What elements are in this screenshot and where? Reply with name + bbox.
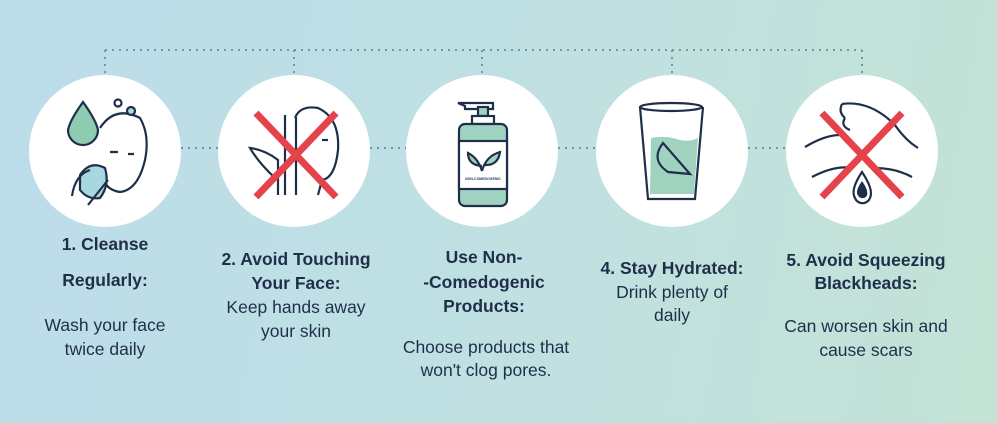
text: step 2: 2. Avoid Touching [221, 249, 371, 269]
text: step 2: Keep hands away [226, 297, 366, 317]
text: step 2: your skin [261, 321, 331, 341]
text: step 4: Drink plenty of [616, 282, 728, 302]
text: step 3: -Comedogenic [423, 272, 545, 292]
text: step 1: Wash your face [45, 315, 165, 335]
text: step 3: Choose products that [403, 337, 569, 357]
text: step 2 [221, 249, 371, 341]
text: step 1: 1. Cleanse [62, 234, 149, 254]
panel: products circle: NON-COMEDOGENIC [465, 177, 501, 181]
icon: hand and face [250, 107, 338, 195]
text: step 4: 4. Stay Hydrated: [601, 258, 743, 278]
panel: avoid touching circle [218, 75, 370, 227]
icon: water drop and face [68, 100, 147, 205]
panel: squeezing circle [786, 75, 938, 227]
text: step 2: Your Face: [251, 273, 341, 293]
panel: cleanse circle [29, 75, 181, 227]
icon: pump bottle [458, 103, 507, 206]
icon: red cross [256, 113, 336, 197]
text: step 1: twice daily [65, 339, 146, 359]
icon: glass of water with lime [640, 103, 703, 199]
text: step 3: Products: [443, 296, 525, 316]
icon: red cross [822, 113, 902, 197]
text: step 4: daily [654, 305, 690, 325]
text: step 1: Regularly: [62, 270, 148, 290]
text: step 3 [403, 247, 569, 380]
text: step 4 [601, 258, 743, 325]
icon: fingers squeezing [805, 103, 918, 203]
panel: hydrated circle [596, 75, 748, 227]
text: step 5: Can worsen skin and [784, 316, 948, 336]
text: step 5 [784, 250, 948, 360]
text: step 5: Blackheads: [814, 273, 918, 293]
text: step 5: 5. Avoid Squeezing [786, 250, 946, 270]
panel: products circle [406, 75, 558, 227]
text: step 1 [45, 234, 165, 359]
text: step 3: Use Non- [446, 247, 523, 267]
text: step 5: cause scars [819, 340, 913, 360]
text: step 3: won't clog pores. [420, 360, 551, 380]
